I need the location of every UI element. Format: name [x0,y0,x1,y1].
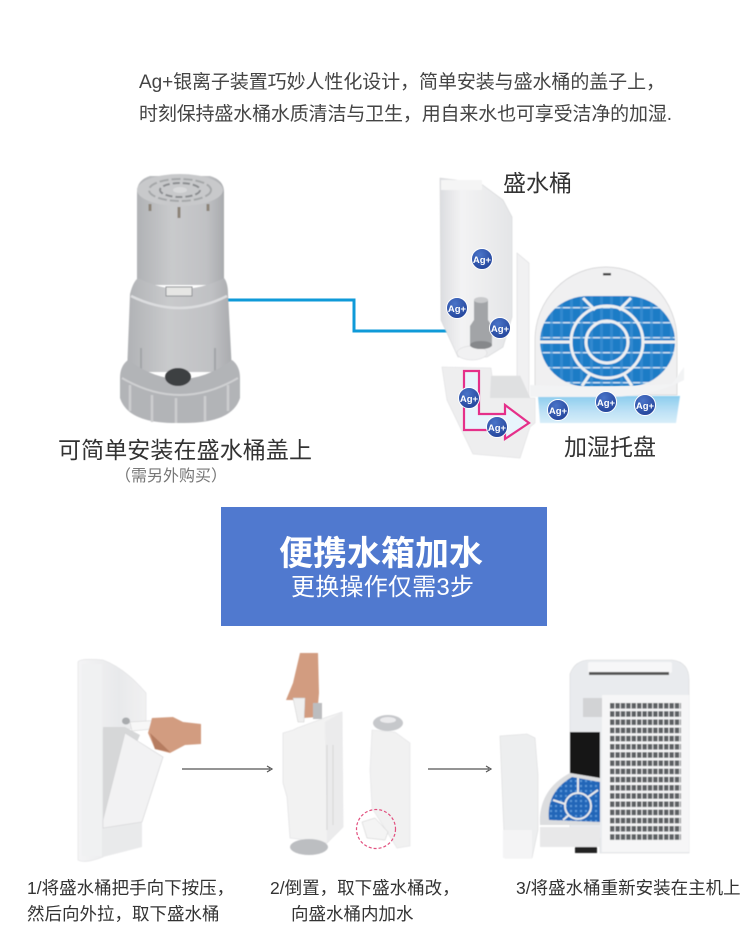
label: easy install: 可简单安装在盛水桶盖上 [58,437,312,463]
Ag+ badges: Ag+ [448,304,467,315]
label: humidifying tray: 加湿托盘 [564,434,656,460]
Ag+ badges: Ag+ [460,394,479,405]
dashed highlight circle [356,810,396,848]
pink flow arrow [464,371,529,439]
intro text: Ag+银离子装置巧妙人性化设计，简单安装与盛水桶的盖子上， [139,71,665,93]
illustration: Ag+ cartridge [120,174,240,423]
caption step 2 [270,878,460,924]
arrow 1 [182,766,272,772]
Ag+ badges: Ag+ [597,398,616,409]
water tank [440,178,529,398]
water tray [530,367,684,423]
banner subtitle: 更换操作仅需3步 [291,574,474,601]
label: sold separately: （需另外购买） [115,467,227,485]
lower channel [442,367,535,458]
caption step 1 [27,878,234,924]
caption step 2: 向盛水桶内加水 [291,904,414,924]
Ag+ badges [446,248,656,438]
label: water tank: 盛水桶 [503,170,572,196]
illustration: tank and tray diagram [440,178,684,458]
arrow 2 [428,766,491,772]
connector line [226,300,450,331]
caption step 2: 2/倒置，取下盛水桶改， [270,878,460,898]
step 1 photo: pressing tank handle [78,659,201,861]
humidifying filter [535,267,677,395]
step 3 photo: purifier with tank [500,660,689,858]
intro text: 时刻保持盛水桶水质清洁与卫生，用自来水也可享受洁净的加湿. [139,103,672,125]
Ag+ badges: Ag+ [473,255,492,266]
caption step 1: 1/将盛水桶把手向下按压， [27,878,234,898]
intro text [139,71,672,125]
caption step 3: 3/将盛水桶重新安装在主机上 [516,878,741,898]
Ag+ badges: Ag+ [491,324,510,335]
banner [221,507,547,626]
Ag+ badges: Ag+ [488,423,507,434]
banner title: 便携水箱加水 [279,535,483,573]
second tank [370,730,410,848]
caption step 1: 然后向外拉，取下盛水桶 [27,904,220,924]
Ag+ badges: Ag+ [549,406,568,417]
Ag+ badges: Ag+ [636,401,655,412]
step 2 photo: inverted tank [283,653,410,855]
